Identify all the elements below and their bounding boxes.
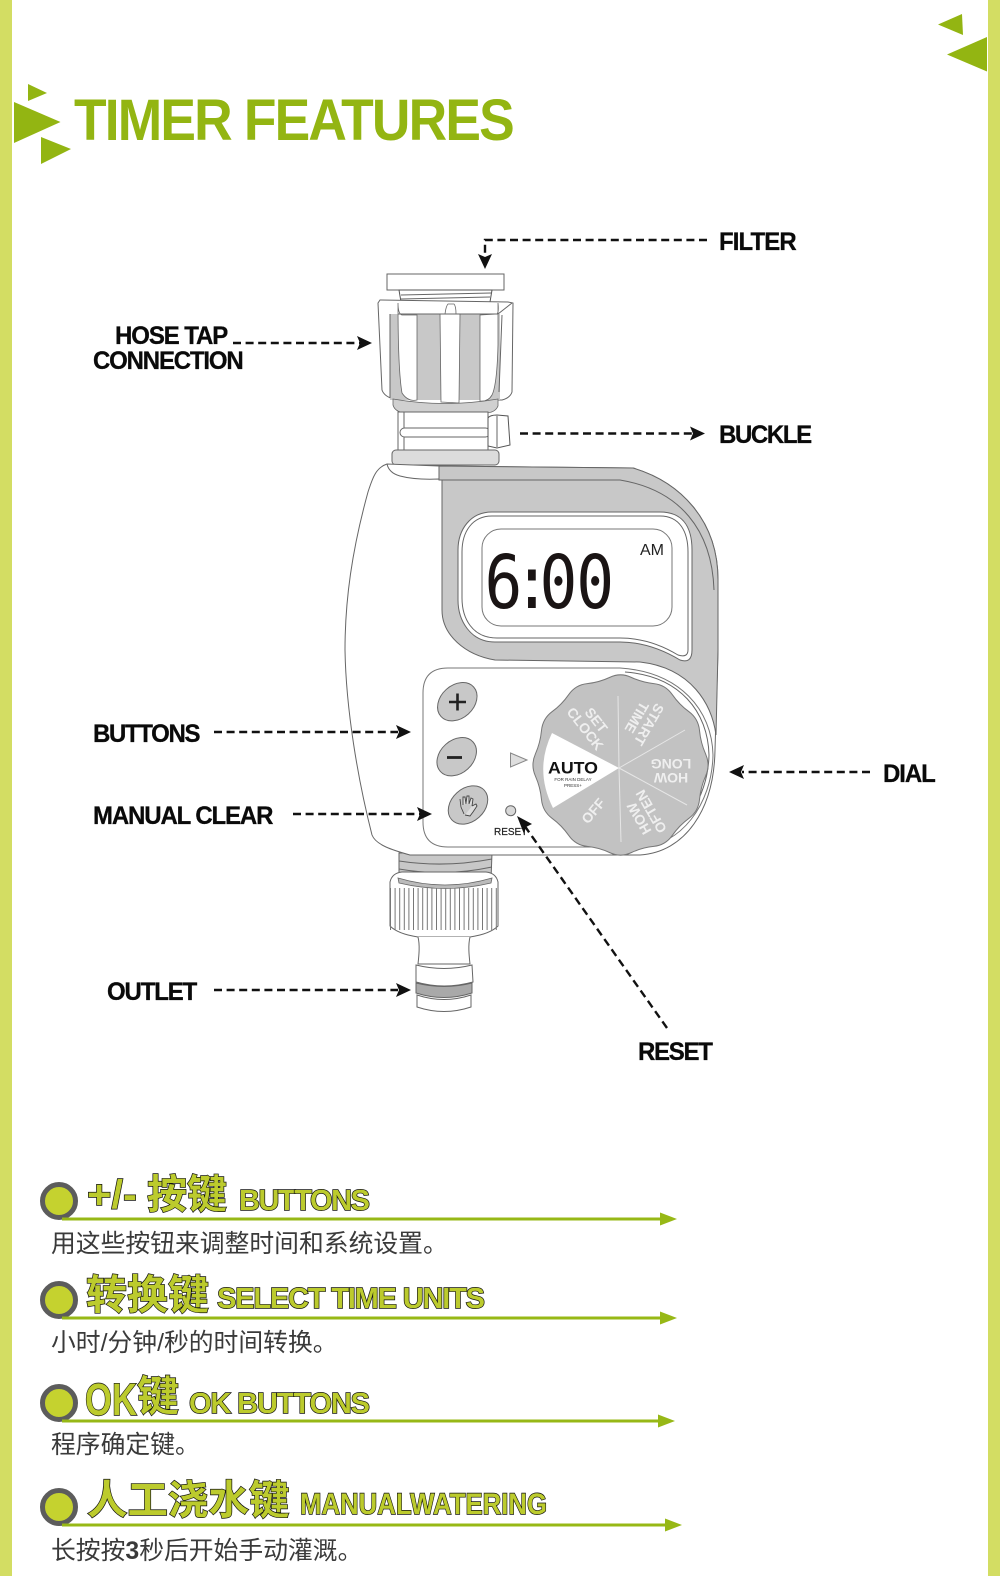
dial ring inner line — [625, 672, 709, 845]
description: 小时/分钟/秒的时间转换。 — [51, 1329, 338, 1357]
icon: heading triangles — [14, 84, 71, 164]
callout: manual clear: MANUAL CLEAR — [93, 803, 274, 830]
callout: dial: DIAL — [883, 761, 936, 788]
LCD recess — [458, 512, 692, 661]
callout: filter: FILTER — [719, 229, 797, 256]
dial small print: FOR RAIN DELAY — [554, 777, 592, 782]
dial label how often: OFTEN — [632, 787, 670, 836]
plus button — [430, 675, 485, 729]
divider arrow — [62, 1312, 677, 1324]
callout: hose tap connection: CONNECTION — [93, 348, 244, 375]
callout: filter — [478, 229, 797, 269]
dial small print second line: PRESS+ — [564, 783, 582, 788]
reset small label: RESET — [494, 827, 527, 838]
left side bar — [0, 0, 12, 1576]
callout: buttons: BUTTONS — [93, 721, 201, 748]
right side bar — [988, 0, 1000, 1576]
heading — [85, 1373, 370, 1425]
hose tap nut — [378, 274, 513, 413]
LCD recess inner line — [462, 516, 688, 656]
bullet — [42, 1284, 76, 1316]
white rib middle — [440, 304, 460, 403]
minus button — [429, 730, 484, 784]
callout: hose tap connection — [93, 323, 372, 375]
heading: MANUALWATERING — [300, 1488, 547, 1521]
callout: buckle — [520, 422, 812, 449]
bullet — [42, 1184, 76, 1218]
grey display bezel — [439, 466, 718, 735]
callout: buttons — [93, 721, 411, 748]
dial label how often — [620, 787, 670, 843]
dial label set clock: SET — [582, 704, 611, 736]
bullet — [42, 1386, 76, 1420]
callout: hose tap connection: HOSE TAP — [115, 323, 228, 350]
reset hole — [506, 806, 516, 816]
selector dial — [533, 675, 708, 855]
description: 用这些按钮来调整时间和系统设置。 — [51, 1230, 448, 1258]
timer device illustration — [345, 274, 718, 1012]
dial label start time: TIME — [622, 699, 652, 736]
heading: OK — [85, 1374, 137, 1425]
dial label set clock — [564, 696, 618, 753]
callout: manual clear — [93, 803, 432, 830]
heading — [86, 1272, 485, 1318]
section: select time units — [42, 1272, 677, 1357]
bullet — [42, 1490, 76, 1524]
dial label AUTO: AUTO — [548, 758, 598, 778]
neck and buckle — [392, 412, 510, 465]
LCD AM label: AM — [640, 542, 664, 559]
dial label how long: LONG — [651, 756, 691, 772]
heading: 人工浇水键 — [87, 1477, 290, 1523]
LCD time: 6:00 — [485, 540, 614, 626]
title: TIMER FEATURES — [74, 88, 515, 152]
callout: buckle: BUCKLE — [719, 422, 812, 449]
white rib left — [398, 303, 417, 400]
body shoulder tab — [387, 464, 714, 590]
callout: reset — [517, 816, 713, 1066]
heading: SELECT TIME UNITS — [217, 1283, 485, 1315]
white rib right — [480, 303, 498, 401]
divider arrow — [62, 1414, 675, 1428]
timer body — [345, 464, 718, 855]
callout: reset: RESET — [638, 1039, 713, 1066]
callout: outlet — [107, 979, 411, 1006]
callout: dial — [729, 761, 936, 788]
pointer triangle — [510, 753, 527, 767]
section: ok buttons — [42, 1373, 675, 1459]
description: 程序确定键。 — [51, 1431, 200, 1459]
dial label start time — [618, 694, 667, 749]
dial label how long: HOW — [653, 770, 688, 786]
dial label how long — [651, 756, 691, 786]
divider arrow — [62, 1518, 682, 1532]
dial label off: OFF — [578, 795, 609, 827]
heading — [87, 1477, 547, 1523]
heading — [87, 1173, 370, 1217]
callout: outlet: OUTLET — [107, 979, 197, 1006]
heading: OK BUTTONS — [189, 1388, 370, 1420]
manual hand button — [441, 778, 495, 832]
heading: BUTTONS — [239, 1185, 370, 1217]
icon: top right triangles — [938, 14, 987, 72]
dial label start time: START — [631, 701, 667, 749]
divider arrow — [62, 1212, 677, 1226]
heading: 转换键 — [86, 1272, 209, 1318]
heading: +/- — [87, 1173, 137, 1217]
description: 长按按3秒后开始手动灌溉。 — [51, 1537, 362, 1565]
heading: 键 — [137, 1373, 179, 1420]
dial label set clock: CLOCK — [564, 704, 607, 753]
section: manual watering — [42, 1477, 682, 1565]
heading: 按键 — [147, 1173, 227, 1217]
button panel — [423, 668, 713, 847]
section: buttons — [42, 1173, 677, 1258]
LCD screen — [482, 529, 672, 626]
dial label how often: HOW — [623, 799, 654, 837]
outlet connector — [390, 853, 498, 1012]
